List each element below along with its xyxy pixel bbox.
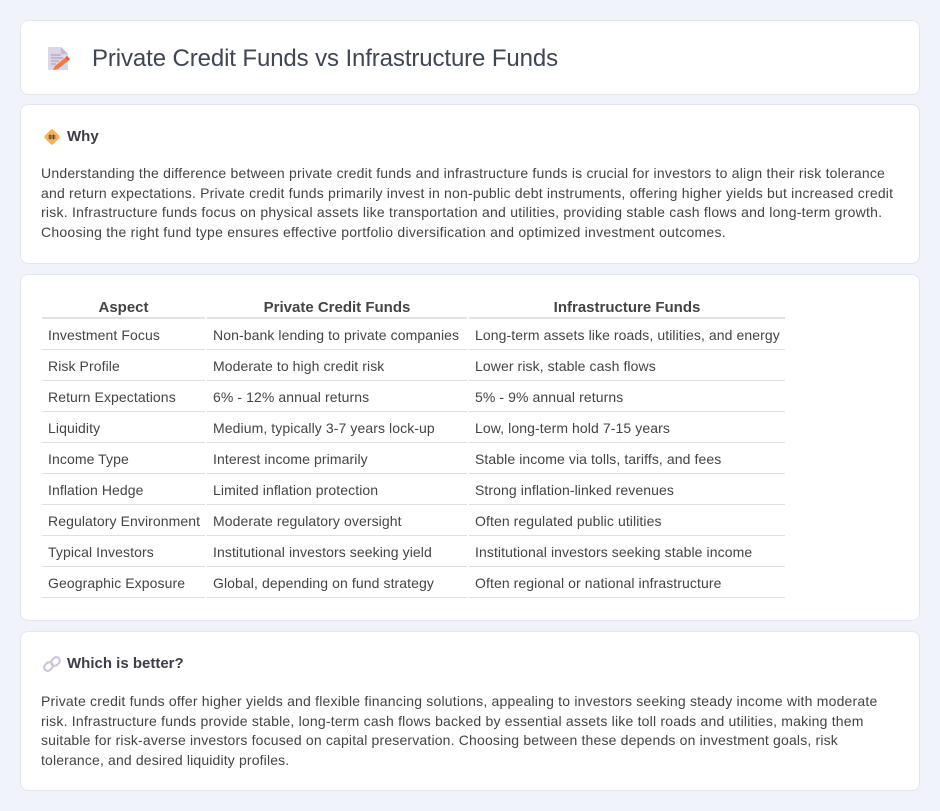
comparison table: Typical Investors xyxy=(48,544,154,560)
comparison table: Liquidity xyxy=(48,420,100,436)
comparison table: Infrastructure Funds xyxy=(554,298,700,316)
comparison table: Interest income primarily xyxy=(213,450,368,466)
heading: why: Why xyxy=(67,128,99,145)
comparison table: Often regional or national infrastructure xyxy=(475,574,722,590)
comparison table: 6% - 12% annual returns xyxy=(213,388,369,404)
text block: which is better: Private credit funds offer higher yields and flexible financing solutions, appealing to investors seeking steady income with moderate xyxy=(41,693,877,709)
comparison table: Investment Focus xyxy=(48,326,160,342)
text block: why: Choosing the right fund type ensures effective portfolio diversification and optimized investment outcomes. xyxy=(41,224,726,240)
icon: document with pencil xyxy=(48,47,70,70)
comparison table: Moderate to high credit risk xyxy=(213,358,384,374)
comparison table: 5% - 9% annual returns xyxy=(475,388,623,404)
comparison table: Strong inflation-linked revenues xyxy=(475,482,674,498)
text block: which is better xyxy=(41,693,877,768)
comparison table: Often regulated public utilities xyxy=(475,512,662,528)
text block: why: and return expectations. Private credit funds primarily invest in non-public debt instruments, offering higher yields but increased credit xyxy=(41,184,893,200)
text block: why xyxy=(41,165,893,240)
comparison table: Aspect xyxy=(98,298,149,316)
icon: link xyxy=(43,656,61,672)
comparison table: Low, long-term hold 7-15 years xyxy=(475,420,670,436)
panel: header xyxy=(20,20,920,95)
comparison table: Risk Profile xyxy=(48,358,120,374)
icon: warning diamond xyxy=(44,129,60,145)
panel: why xyxy=(20,104,920,264)
comparison table: Regulatory Environment xyxy=(48,512,200,528)
comparison table: Income Type xyxy=(48,450,129,466)
panel: which is better xyxy=(20,631,920,791)
comparison table: Medium, typically 3-7 years lock-up xyxy=(213,420,435,436)
comparison table: Lower risk, stable cash flows xyxy=(475,358,656,374)
comparison table: Stable income via tolls, tariffs, and fees xyxy=(475,450,721,466)
text block: why: Understanding the difference between private credit funds and infrastructure funds is crucial for investors to align their risk tolerance xyxy=(41,165,885,181)
comparison table: Non-bank lending to private companies xyxy=(213,326,459,342)
comparison table xyxy=(42,298,785,598)
heading: which is better: Which is better? xyxy=(67,655,184,672)
comparison table: Inflation Hedge xyxy=(48,482,144,498)
comparison table: Return Expectations xyxy=(48,388,176,404)
title: Private Credit Funds vs Infrastructure Funds xyxy=(92,45,558,72)
text block: which is better: risk. Infrastructure funds provide stable, long-term cash flows backed by essential assets like toll roads and utilities, making them xyxy=(41,712,864,728)
comparison table: Institutional investors seeking yield xyxy=(213,544,432,560)
comparison table: Moderate regulatory oversight xyxy=(213,512,402,528)
comparison table: Long-term assets like roads, utilities, and energy xyxy=(475,326,780,342)
panel: comparison table xyxy=(20,274,920,621)
comparison table: Limited inflation protection xyxy=(213,482,378,498)
text block: which is better: suitable for risk-averse investors focused on capital preservation. Choosing between these depends on investment goals, risk xyxy=(41,732,838,748)
text block: why: risk. Infrastructure funds focus on physical assets like transportation and utilities, providing stable cash flows and long-term growth. xyxy=(41,204,882,220)
comparison table: Private Credit Funds xyxy=(264,298,410,316)
comparison table: Geographic Exposure xyxy=(48,574,185,590)
comparison table: Institutional investors seeking stable income xyxy=(475,544,752,560)
comparison table: Global, depending on fund strategy xyxy=(213,574,434,590)
text block: which is better: tolerance, and desired liquidity profiles. xyxy=(41,752,289,768)
